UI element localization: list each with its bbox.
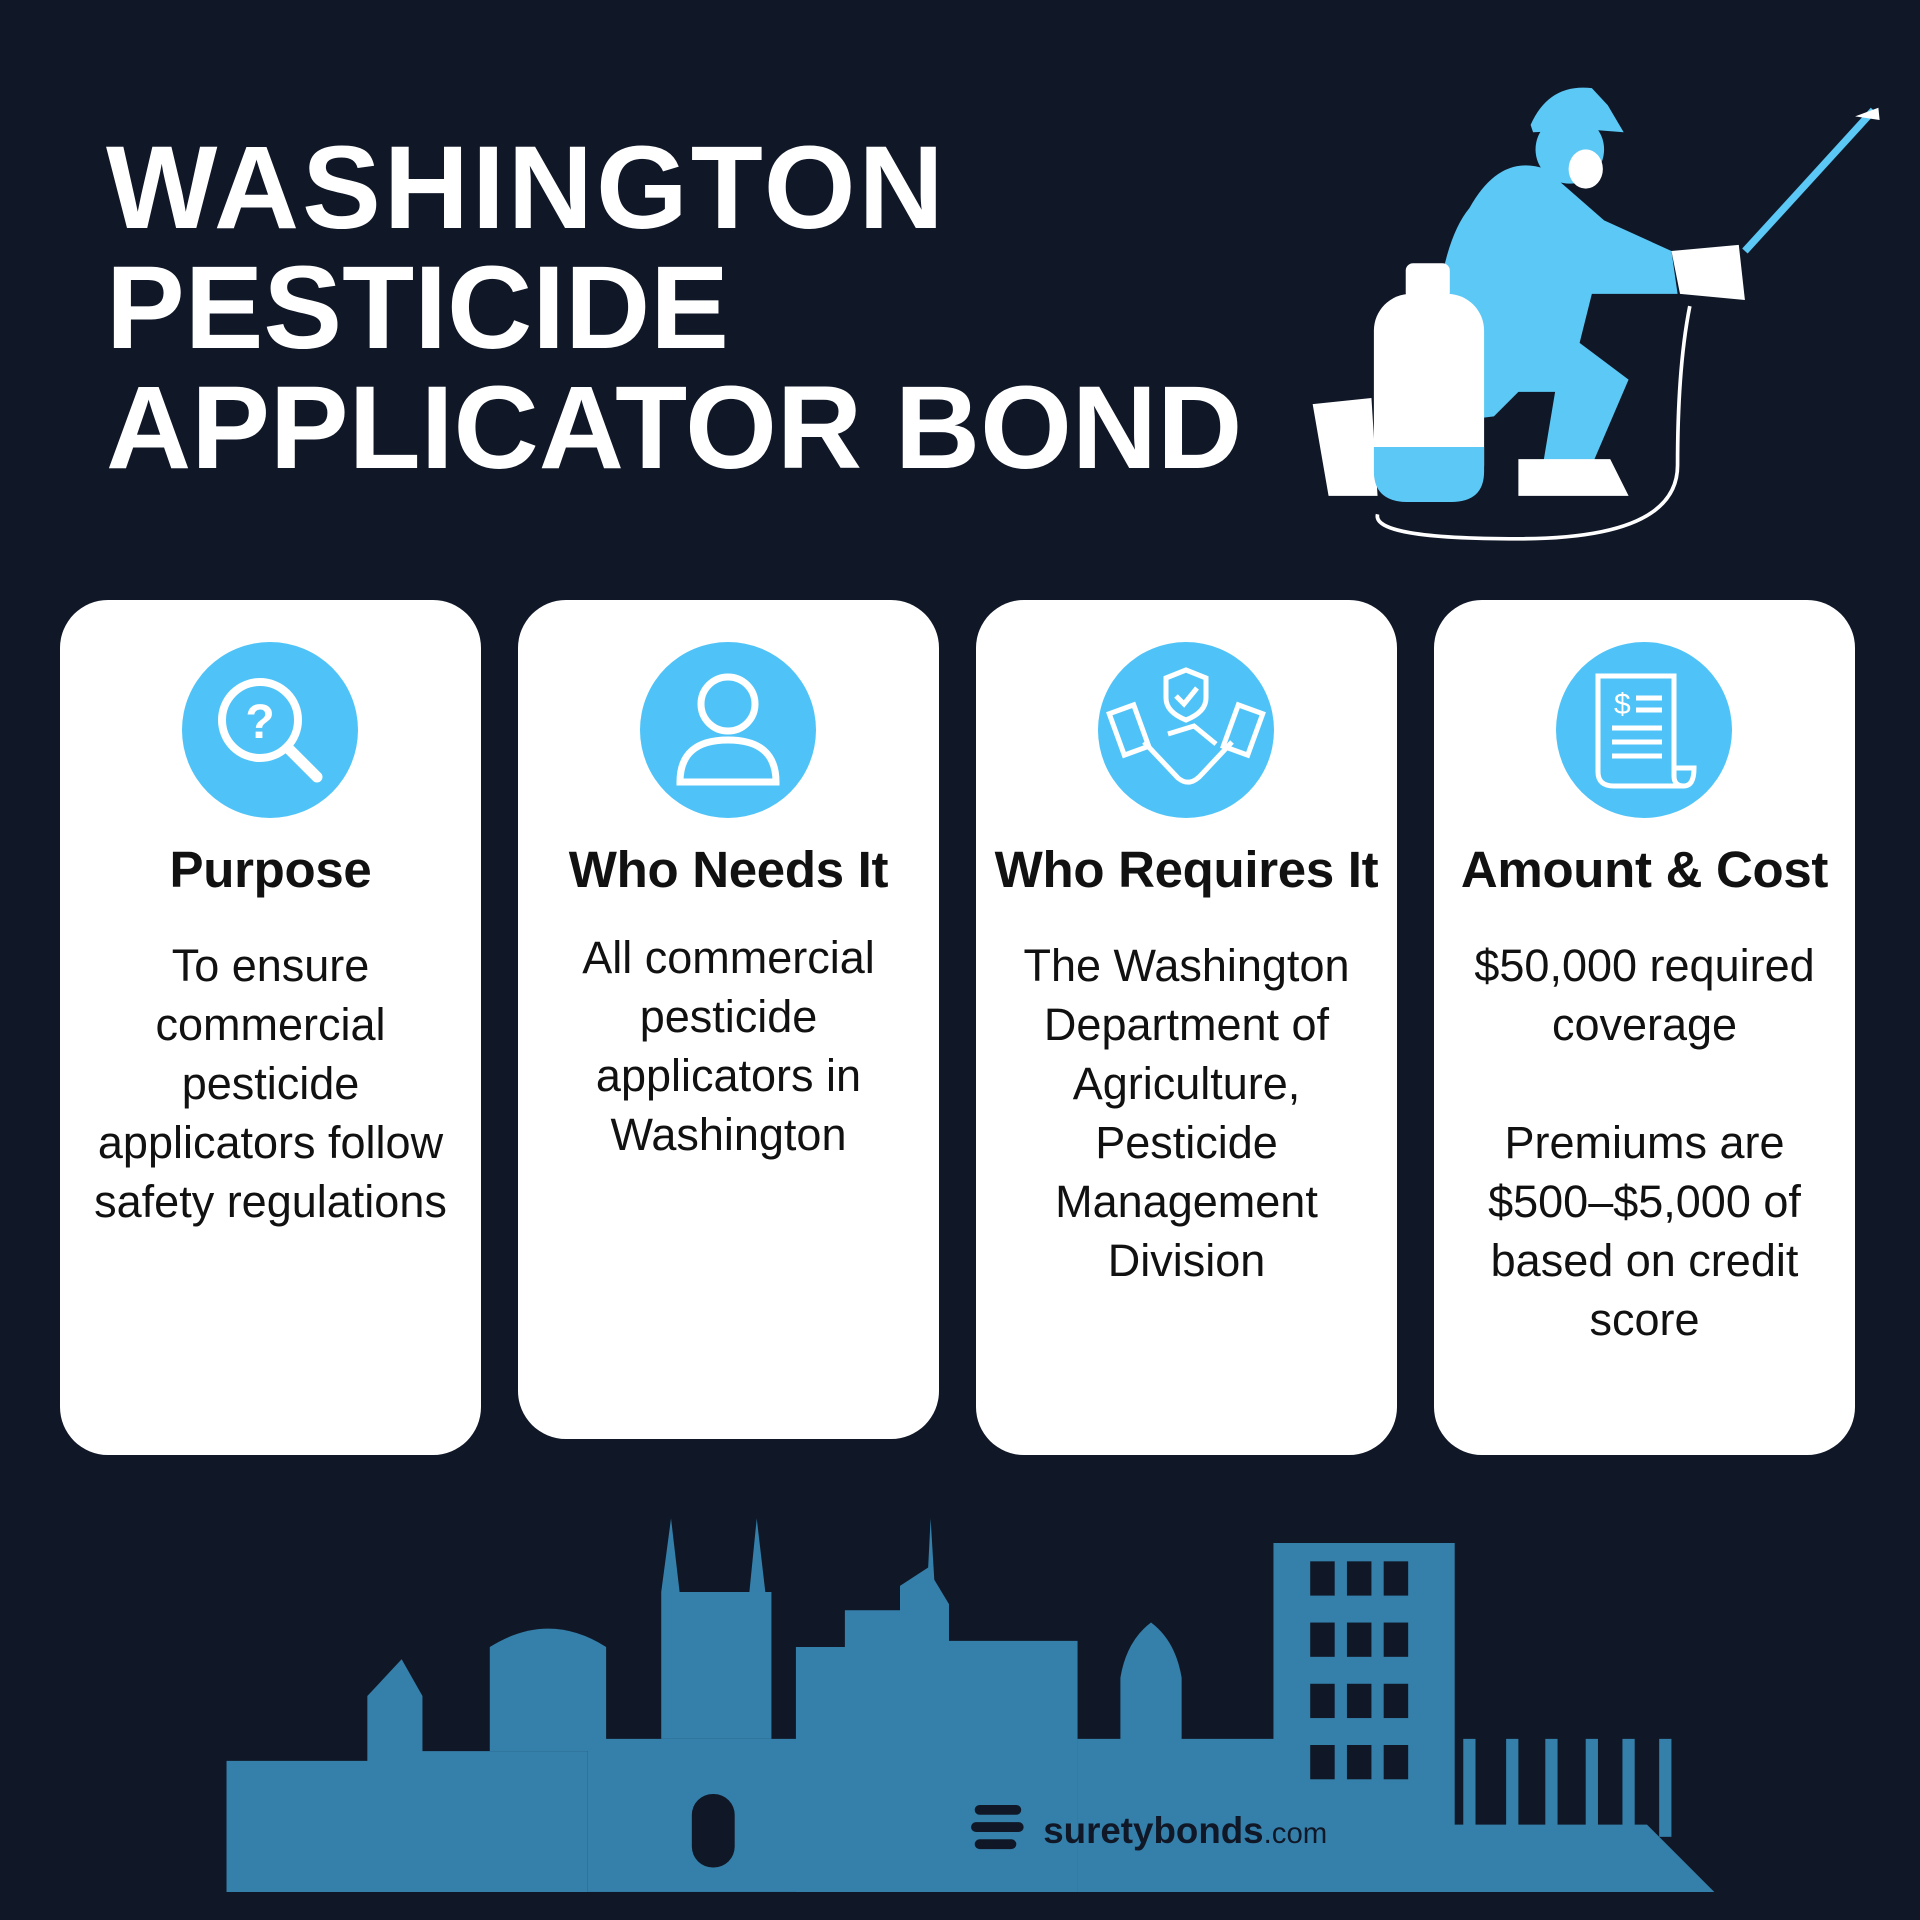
icon: handshake shield <box>1098 642 1274 818</box>
text: who requires: Department of <box>1044 999 1329 1050</box>
icon: invoice: $ <box>1614 688 1631 721</box>
text: who needs: pesticide <box>640 991 817 1042</box>
illustration: pesticide sprayer worker <box>1312 88 1880 541</box>
text: who needs: All commercial <box>582 932 875 983</box>
text: purpose: applicators follow <box>98 1117 443 1168</box>
card: Who Requires It <box>976 600 1397 1455</box>
title <box>106 122 1242 494</box>
text: purpose: safety regulations <box>94 1176 447 1227</box>
text: purpose <box>94 940 447 1227</box>
text: amount: $500–$5,000 of <box>1488 1176 1801 1227</box>
text: who requires: The Washington <box>1023 940 1350 991</box>
title: APPLICATOR BOND <box>106 362 1242 494</box>
icon: magnifier question <box>182 642 358 818</box>
text: who requires <box>1023 940 1350 1286</box>
text: who needs: Washington <box>611 1109 846 1160</box>
title: WASHINGTON <box>106 122 947 254</box>
text: purpose: To ensure <box>172 940 369 991</box>
text: purpose: commercial <box>155 999 386 1050</box>
text: amount: score <box>1589 1294 1700 1345</box>
card: Who Needs It <box>518 600 939 1439</box>
icon: invoice <box>1556 642 1732 818</box>
text: who requires: Division <box>1108 1235 1265 1286</box>
text: who needs: applicators in <box>596 1050 861 1101</box>
text: who requires: Agriculture, <box>1073 1058 1300 1109</box>
text: amount: $50,000 required <box>1474 940 1815 991</box>
card: Purpose <box>60 600 481 1455</box>
card: Who Requires It: Who Requires It <box>995 841 1378 898</box>
text: amount <box>1474 940 1815 1345</box>
text: amount: based on credit <box>1491 1235 1798 1286</box>
text: purpose: pesticide <box>182 1058 359 1109</box>
card: Amount & Cost: Amount & Cost <box>1461 841 1828 898</box>
logo: suretybonds.com: suretybonds.com <box>1043 1810 1327 1851</box>
skyline <box>226 1518 1714 1892</box>
card: Amount & Cost <box>1434 600 1855 1455</box>
text: amount: Premiums are <box>1504 1117 1785 1168</box>
icon: magnifier question: ? <box>245 696 275 749</box>
card: Purpose: Purpose <box>170 841 371 898</box>
title: PESTICIDE <box>106 242 729 374</box>
text: amount: coverage <box>1552 999 1737 1050</box>
text: who requires: Pesticide <box>1095 1117 1278 1168</box>
text: who needs <box>582 932 875 1160</box>
card: Who Needs It: Who Needs It <box>569 841 888 898</box>
text: who requires: Management <box>1055 1176 1318 1227</box>
icon: person <box>640 642 816 818</box>
